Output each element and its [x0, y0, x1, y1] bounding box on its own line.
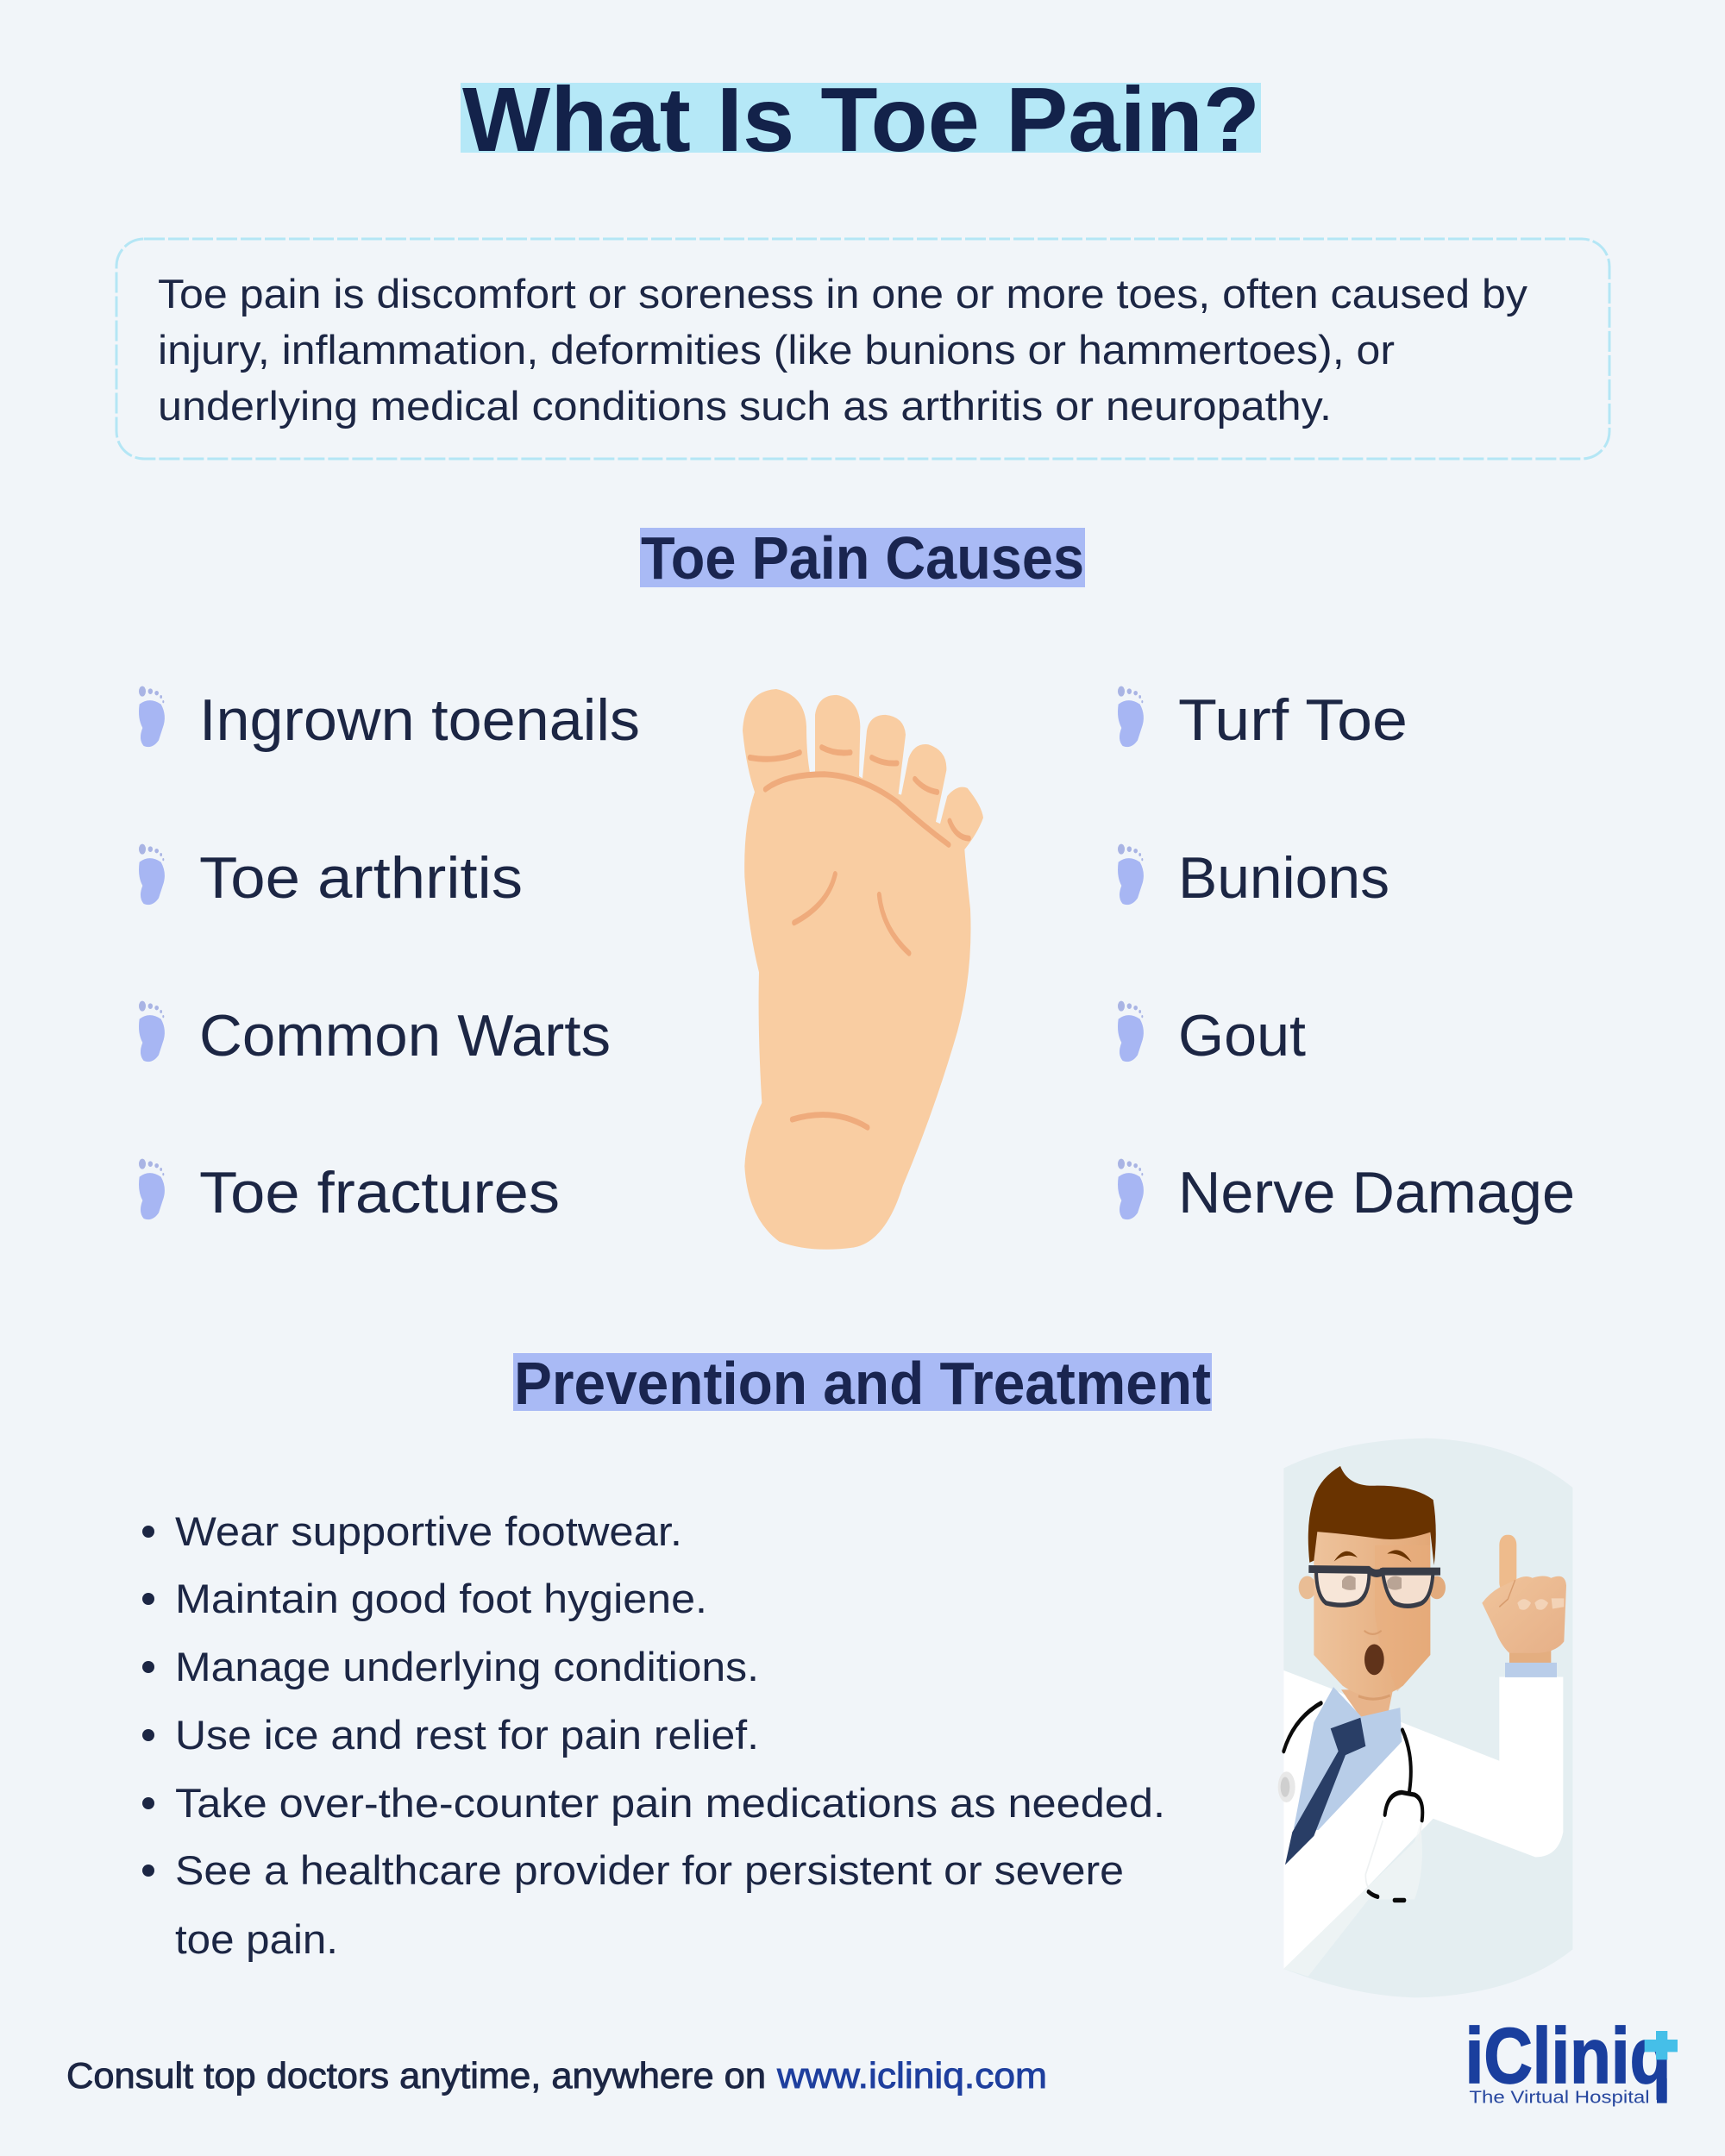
panel: causes right column — [1118, 686, 1575, 1225]
mouth and nose — [1364, 1645, 1384, 1675]
cause: bunions: Bunions — [1178, 845, 1389, 911]
list: prevention tips — [142, 1508, 1165, 1962]
list: prevention tips: Manage underlying conditions. — [175, 1644, 759, 1689]
icon: footprint — [1118, 686, 1144, 747]
list: prevention tips: Take over-the-counter pain medications as needed. — [175, 1780, 1165, 1826]
cause: common warts: Common Warts — [199, 1003, 611, 1069]
neck — [1341, 1689, 1393, 1719]
list: prevention tips: Maintain good foot hygiene. — [175, 1576, 707, 1621]
illustration: foot sole — [743, 689, 983, 1250]
heading: causes: Toe Pain Causes — [641, 524, 1084, 592]
stethoscope — [1283, 1703, 1422, 1900]
list: prevention tips: Wear supportive footwear. — [175, 1508, 682, 1554]
icon: footprint — [1118, 1001, 1144, 1062]
definition text: injury, inflammation, deformities (like bunions or hammertoes), or — [158, 327, 1395, 373]
shirt and tie — [1294, 1687, 1402, 1830]
hair — [1308, 1466, 1436, 1565]
cause: toe fractures: Toe fractures — [199, 1160, 560, 1225]
icon: footprint — [139, 1159, 165, 1219]
definition text: underlying medical conditions such as arthritis or neuropathy. — [158, 383, 1332, 429]
cause: turf toe: Turf Toe — [1178, 687, 1408, 753]
panel: causes left column — [139, 686, 640, 1225]
logo: iCliniq: iCliniq — [1465, 2013, 1671, 2100]
logo: iCliniq: The Virtual Hospital — [1469, 2088, 1650, 2107]
cause: nerve damage: Nerve Damage — [1178, 1160, 1575, 1225]
cause: ingrown toenails: Ingrown toenails — [199, 687, 640, 753]
footer text: Consult top doctors anytime, anywhere on — [66, 2055, 766, 2096]
icon: footprint — [1118, 844, 1144, 905]
icon: footprint — [139, 686, 165, 747]
head — [1299, 1576, 1316, 1599]
list: prevention tips: See a healthcare provider for persistent or severe — [175, 1847, 1124, 1893]
panel: definition — [116, 239, 1609, 459]
glasses — [1308, 1569, 1440, 1606]
list: prevention tips: Use ice and rest for pain relief. — [175, 1712, 759, 1758]
definition text — [158, 271, 1528, 429]
hand — [1509, 1645, 1551, 1664]
icon: footprint — [1118, 1159, 1144, 1219]
doctor backdrop — [1283, 1438, 1572, 1997]
heading: prevention and treatment: Prevention and Treatment — [514, 1350, 1211, 1417]
title: What Is Toe Pain? — [462, 69, 1260, 171]
coat — [1283, 1670, 1563, 1969]
list: prevention tips: toe pain. — [175, 1916, 338, 1962]
definition text: Toe pain is discomfort or soreness in one or more toes, often caused by — [158, 271, 1528, 317]
cause: toe arthritis: Toe arthritis — [199, 845, 523, 911]
illustration: doctor — [1278, 1438, 1572, 1997]
icon: footprint — [139, 1001, 165, 1062]
icon: footprint — [139, 844, 165, 905]
footer link: www.icliniq.com — [776, 2055, 1047, 2096]
cause: gout: Gout — [1178, 1003, 1306, 1069]
